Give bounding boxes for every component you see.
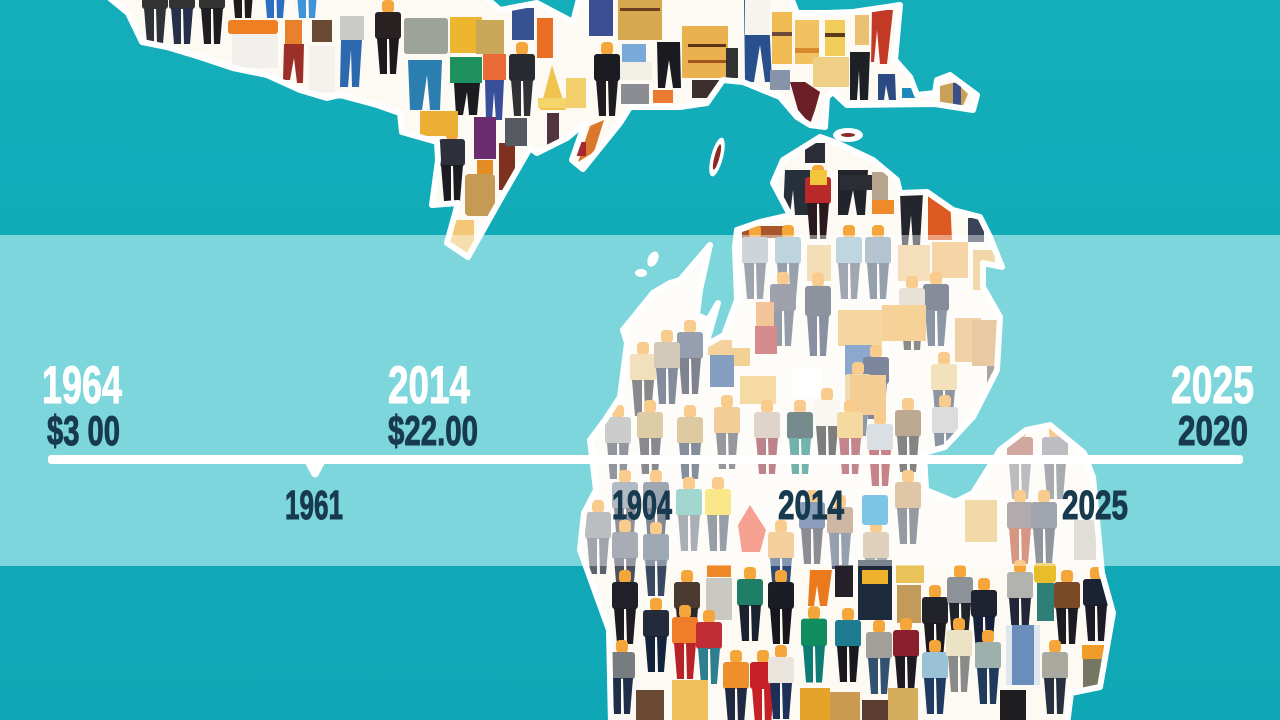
top label 1964 bbox=[42, 356, 122, 454]
top label 1964: $3 00 bbox=[47, 407, 120, 454]
light band bbox=[0, 235, 1280, 566]
timeline line bbox=[48, 455, 1243, 464]
top label 2025 bbox=[1171, 356, 1254, 454]
timeline bbox=[42, 356, 1254, 528]
people: lower peninsula bbox=[585, 143, 1109, 720]
bottom year labels bbox=[285, 482, 1128, 528]
top label 2014: 2014 bbox=[388, 356, 470, 415]
map outline bbox=[106, 0, 1113, 720]
bottom year labels: 1961 bbox=[285, 482, 343, 528]
bottom year labels: 1904 bbox=[612, 482, 672, 528]
top label 2014: $22.00 bbox=[388, 407, 478, 454]
top label 1964: 1964 bbox=[42, 356, 122, 415]
islands bbox=[635, 128, 863, 277]
top label 2025: 2020 bbox=[1178, 407, 1248, 454]
bottom year labels: 2014 bbox=[778, 482, 844, 528]
top label 2014 bbox=[388, 356, 478, 454]
bottom year labels: 2025 bbox=[1062, 482, 1128, 528]
faded band over map bbox=[450, 235, 1096, 566]
people: upper peninsula bbox=[142, 0, 968, 255]
map of Michigan made of people bbox=[108, 0, 1116, 720]
map base bbox=[106, 0, 1113, 720]
timeline tick bbox=[305, 463, 325, 478]
island details bbox=[711, 133, 855, 170]
